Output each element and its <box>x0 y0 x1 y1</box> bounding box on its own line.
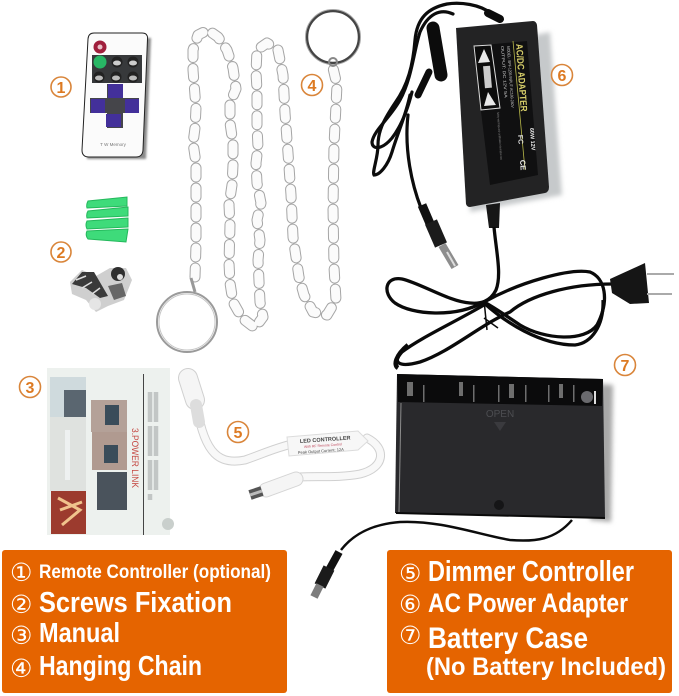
badge 7: 7 <box>621 358 630 375</box>
item 2: ② <box>10 590 32 619</box>
adapter shadow <box>470 32 562 212</box>
icon: dimmer controller <box>188 378 381 495</box>
icon: AC power adapter with cables: CE <box>518 160 528 171</box>
OPEN marking: OPEN <box>486 409 514 420</box>
manual <box>47 368 174 535</box>
icon: AC power adapter with cables: OUTPUT: DC 12V 5A <box>500 46 509 98</box>
icon: bottom split ring <box>157 278 217 352</box>
power plug <box>486 203 500 228</box>
icon: top split ring <box>306 10 360 66</box>
panel: right legend <box>387 550 672 693</box>
power cord loops <box>387 227 612 368</box>
badge 1: 1 <box>57 80 66 97</box>
adapter body <box>456 21 549 207</box>
badge 4 <box>302 74 322 96</box>
item 5: Dimmer Controller <box>428 556 634 588</box>
item 2: Screws Fixation <box>39 587 232 619</box>
icon: dimmer controller: LED CONTROLLER <box>300 435 351 445</box>
item 3: Manual <box>39 617 120 648</box>
panel: left legend <box>2 550 287 693</box>
item 5: ⑤ <box>399 559 421 588</box>
icon: AC power adapter with cables: FC <box>516 135 524 144</box>
badge 1 <box>51 77 71 97</box>
manual heading: 3.POWER LINK <box>130 428 140 488</box>
hanging chain <box>193 30 337 328</box>
item 1: Remote Controller (optional) <box>39 562 271 583</box>
badge 3: 3 <box>26 380 35 397</box>
icon: remote controller: T W Memory <box>100 142 127 147</box>
icon: AC power adapter with cables: Safety warnings and certification information text <box>496 112 503 160</box>
adapter label <box>473 41 538 185</box>
item 4 <box>10 650 202 683</box>
badge 6 <box>552 64 572 86</box>
badge 3 <box>20 376 40 398</box>
icon: dimmer controller: With RF Remote Control <box>304 442 342 449</box>
badge 4: 4 <box>308 78 317 95</box>
icon: remote controller <box>82 33 151 159</box>
icon: AC power adapter with cables: MODEL: SPF-1205 INPUT: AC100-240V <box>506 46 515 108</box>
item 3 <box>10 617 120 650</box>
item 7: ⑦ <box>399 621 421 650</box>
item 4: Hanging Chain <box>39 650 202 681</box>
battery plug <box>328 552 339 572</box>
badge 6: 6 <box>558 68 567 85</box>
battery cable <box>341 520 572 550</box>
item 6: AC Power Adapter <box>428 588 628 618</box>
badge 2 <box>51 242 71 262</box>
item 4: ④ <box>10 654 32 683</box>
wall plug <box>610 263 649 304</box>
item 1: ① <box>10 558 32 587</box>
icon: battery case <box>314 374 613 597</box>
icon: dimmer controller: Peak Output Current: 12A <box>298 447 344 455</box>
badge 2: 2 <box>57 245 66 262</box>
item 7: Battery Case <box>428 622 588 655</box>
adapter heading: AC/DC ADAPTER <box>513 43 529 112</box>
output cable <box>372 3 500 208</box>
badge 5 <box>228 422 248 442</box>
badge 5: 5 <box>234 425 243 442</box>
caution box <box>474 45 500 110</box>
icon: AC power adapter with cables <box>372 3 674 368</box>
item 1 <box>10 558 271 587</box>
icon: AC power adapter with cables: 60W 12V <box>528 128 536 151</box>
icon: screws <box>70 267 132 312</box>
badge 7 <box>614 354 636 376</box>
icon: green wall anchors <box>86 197 128 242</box>
item 6: ⑥ <box>399 590 421 619</box>
battery note: (No Battery Included) <box>426 653 666 681</box>
item 3: ③ <box>10 621 32 650</box>
